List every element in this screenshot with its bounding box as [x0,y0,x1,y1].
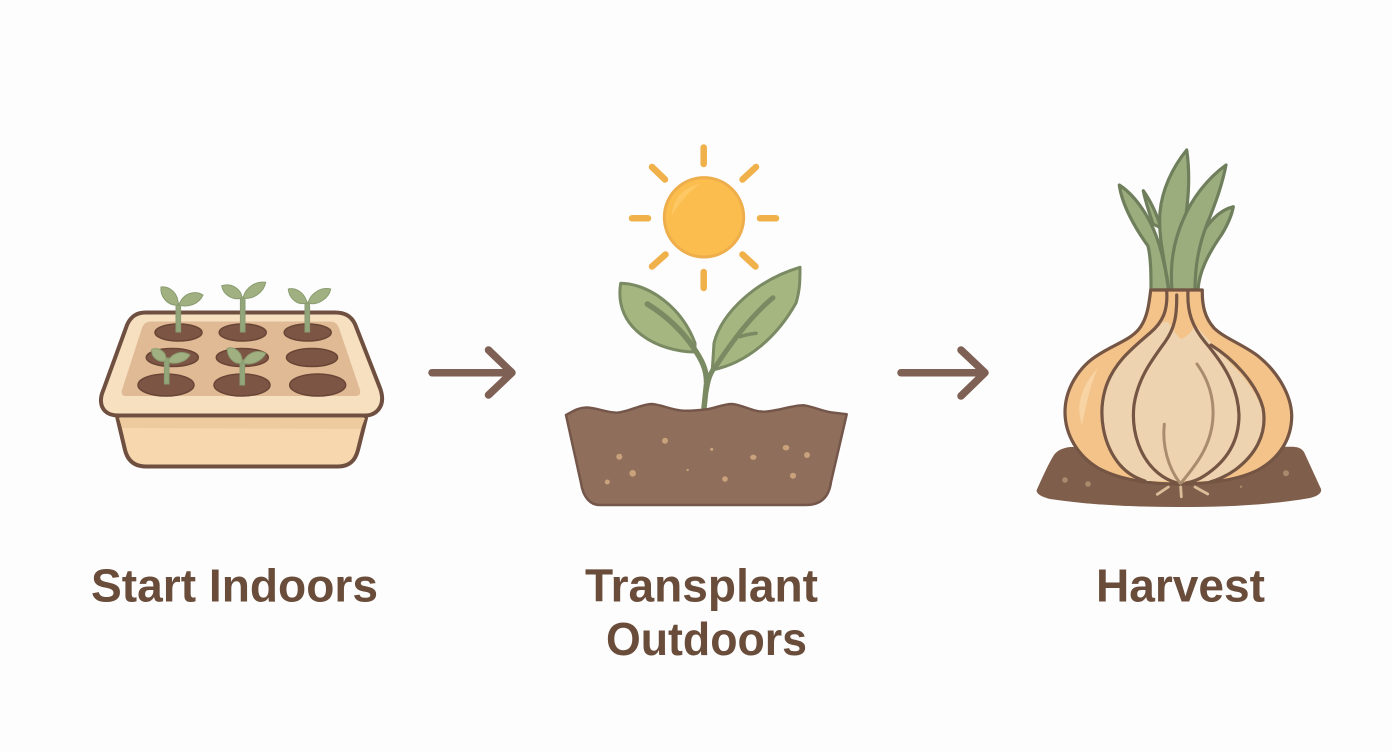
step 2: sun and transplanted seedling [566,148,847,505]
seedling sprouts [152,282,331,385]
arrow: start to transplant [432,350,512,395]
arrow: transplant to harvest [901,350,985,396]
tray body [116,414,367,466]
onion core veins [1164,364,1213,483]
onion roots [1157,487,1208,497]
label: transplant outdoors [585,560,818,665]
left leaf [620,283,695,352]
label: start indoors: Start Indoors [91,560,378,612]
soil cells [138,324,346,396]
step 1: seedling tray [101,282,382,466]
right leaf [712,267,800,370]
icon: sun rays [632,148,776,288]
onion leaves [1119,150,1233,290]
tray rim [101,312,382,416]
soil mound [1037,447,1321,507]
soil specks [605,438,810,484]
plant stem and veins [647,298,773,408]
tray inner floor [122,322,360,396]
tray body shadow band [119,418,365,429]
soil bed [566,404,847,505]
onion highlight [1079,368,1098,425]
icon: sun disc [664,178,744,257]
onion inner pale layers [1102,322,1264,481]
step 3: harvested onion [1037,150,1321,507]
onion bulb [1065,290,1292,484]
label: transplant outdoors: Transplant [585,560,818,612]
sun highlight [672,184,700,215]
label: harvest: Harvest [1096,560,1265,612]
mound specks [1062,470,1289,488]
label: transplant outdoors: Outdoors [606,613,807,665]
onion layer outlines [1102,291,1264,483]
